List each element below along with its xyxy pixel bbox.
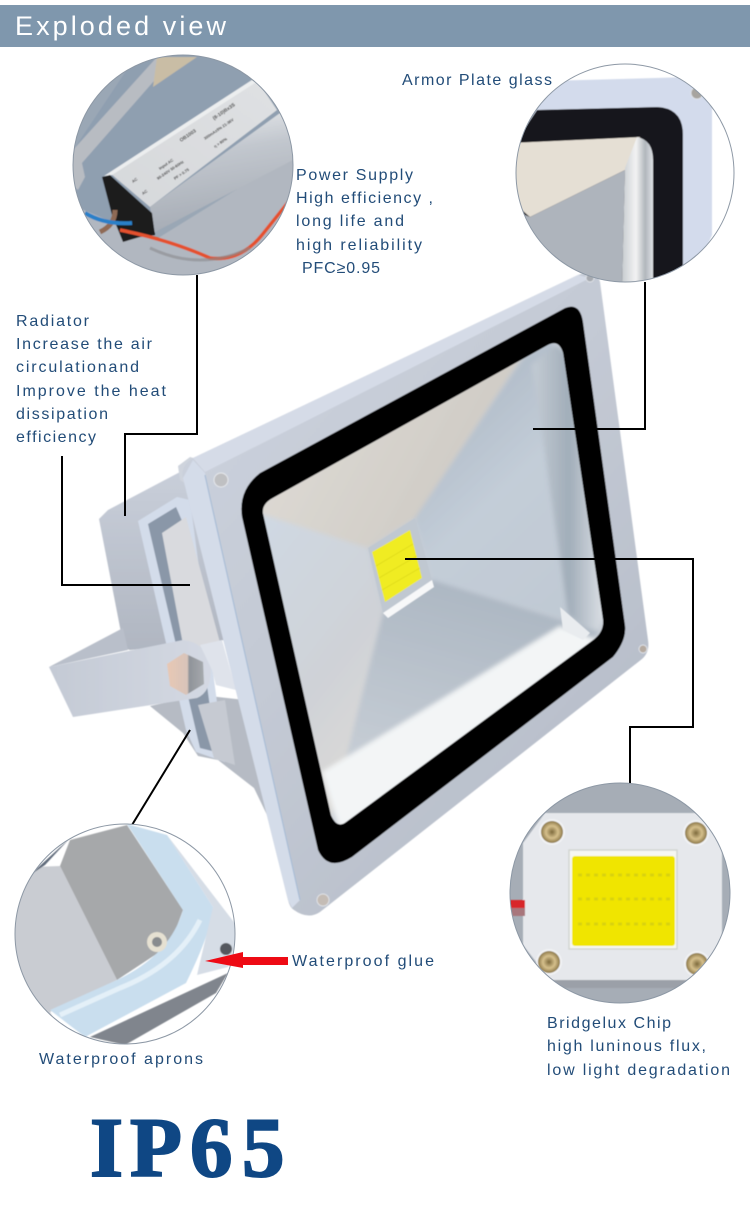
lower back plate xyxy=(150,695,267,815)
driver printed text: 90-240V 50-60Hz xyxy=(156,159,185,181)
frame screw xyxy=(691,88,702,99)
label: radiator: circulationand xyxy=(16,359,139,376)
driver printed text: η > 80% xyxy=(213,136,228,149)
bracket elbow xyxy=(200,640,236,690)
leader: waterproof aprons xyxy=(132,730,190,825)
lower shadow xyxy=(554,980,686,988)
driver extrusion xyxy=(150,113,293,232)
title banner xyxy=(0,5,750,47)
label: bridgelux chip: Bridgelux Chip xyxy=(547,1015,671,1032)
circle: chip detail xyxy=(510,783,730,1003)
driver label plate xyxy=(110,80,277,207)
reflector facets xyxy=(250,340,606,835)
frame bottom edge xyxy=(90,973,228,1045)
rear rubber seal xyxy=(138,497,225,762)
red wire xyxy=(510,900,525,908)
LED chip xyxy=(372,530,422,602)
label: power supply: PFC≥0.95 xyxy=(302,260,380,277)
bracket plate xyxy=(162,517,222,650)
label: bridgelux chip xyxy=(547,1015,730,1079)
gold screws xyxy=(539,819,565,845)
circle: power supply detail xyxy=(72,54,294,276)
hex bolt xyxy=(167,653,204,695)
yellow chip xyxy=(572,856,675,946)
silicone apron xyxy=(50,824,213,1037)
label: power supply xyxy=(296,167,433,277)
label: armor plate glass: Armor Plate glass xyxy=(402,72,552,89)
label: radiator xyxy=(16,313,167,446)
label: power supply: High efficiency , xyxy=(296,190,433,207)
frame left bevel xyxy=(183,460,300,908)
frame top bevel xyxy=(193,275,590,472)
leader: radiator xyxy=(62,456,190,585)
seal screw xyxy=(147,932,167,952)
chip surround xyxy=(368,518,432,613)
label: radiator: Increase the air xyxy=(16,336,153,353)
driver printed text xyxy=(131,102,237,196)
wires xyxy=(100,210,115,232)
floodlight product photo xyxy=(49,273,648,916)
label: radiator: Improve the heat xyxy=(16,383,167,400)
label: waterproof glue: Waterproof glue xyxy=(292,953,434,970)
driver printed text: 300mA±5% 21-36V xyxy=(203,117,235,141)
driver printed text: OB1003 xyxy=(179,128,198,144)
reflector left facet xyxy=(262,515,376,825)
label: radiator: dissipation xyxy=(16,406,108,423)
frame screws xyxy=(214,473,228,487)
chip dot rows xyxy=(578,874,670,876)
dark panel corner xyxy=(34,840,69,872)
window bright strip xyxy=(622,137,653,285)
label: bridgelux chip: low light degradation xyxy=(547,1062,730,1079)
driver end cap xyxy=(102,175,155,242)
bracket arm top wedge xyxy=(49,628,128,667)
module plate xyxy=(523,813,722,980)
frame outer xyxy=(182,273,648,916)
black gasket xyxy=(241,307,625,863)
circle: waterproof aprons detail xyxy=(5,824,240,1045)
driver printed text: AC xyxy=(141,188,148,196)
label: power supply: long life and xyxy=(296,213,404,230)
red arrow xyxy=(205,952,288,968)
light housing xyxy=(16,866,117,1016)
label: bridgelux chip: high luninous flux, xyxy=(547,1038,706,1055)
metal corner xyxy=(170,839,234,975)
leader lines xyxy=(62,275,693,825)
frame corner xyxy=(527,77,712,266)
reflector right strip xyxy=(532,345,606,637)
corner screw xyxy=(220,943,232,955)
bracket arm xyxy=(49,640,211,717)
circle: armor plate glass detail xyxy=(500,64,734,285)
heading: IP65: IP65 xyxy=(90,1101,284,1195)
bright corner xyxy=(560,607,590,640)
driver printed text: (8-10)Bx3S xyxy=(212,102,237,122)
upper screw lug xyxy=(178,457,200,490)
window warm facet xyxy=(510,137,640,217)
label: radiator: Radiator xyxy=(16,313,90,330)
reflector right facet xyxy=(415,340,600,630)
driver printed text: AC xyxy=(131,176,138,184)
black gasket xyxy=(510,107,683,285)
reflector window xyxy=(263,343,603,824)
label: power supply: high reliability xyxy=(296,237,422,254)
leader: power supply xyxy=(125,275,197,516)
reflector bottom facet xyxy=(330,580,600,830)
bracket in background xyxy=(74,58,157,190)
radiator housing xyxy=(99,470,225,650)
label: waterproof aprons: Waterproof aprons xyxy=(39,1051,203,1068)
background tray xyxy=(76,56,279,220)
title: Exploded view xyxy=(15,11,226,41)
window grey facet xyxy=(524,170,626,282)
reflector top facet xyxy=(262,356,526,546)
label: power supply: Power Supply xyxy=(296,167,413,184)
leader: armor plate glass xyxy=(533,282,645,429)
driver printed text: Input AC xyxy=(158,157,174,171)
reflector bright lower strip xyxy=(322,626,597,830)
driver printed text: PF > 0.75 xyxy=(173,166,191,181)
label: radiator: efficiency xyxy=(16,429,96,446)
chip rim xyxy=(569,850,677,949)
leader: chip xyxy=(405,559,693,783)
aluminium panel xyxy=(60,825,183,980)
